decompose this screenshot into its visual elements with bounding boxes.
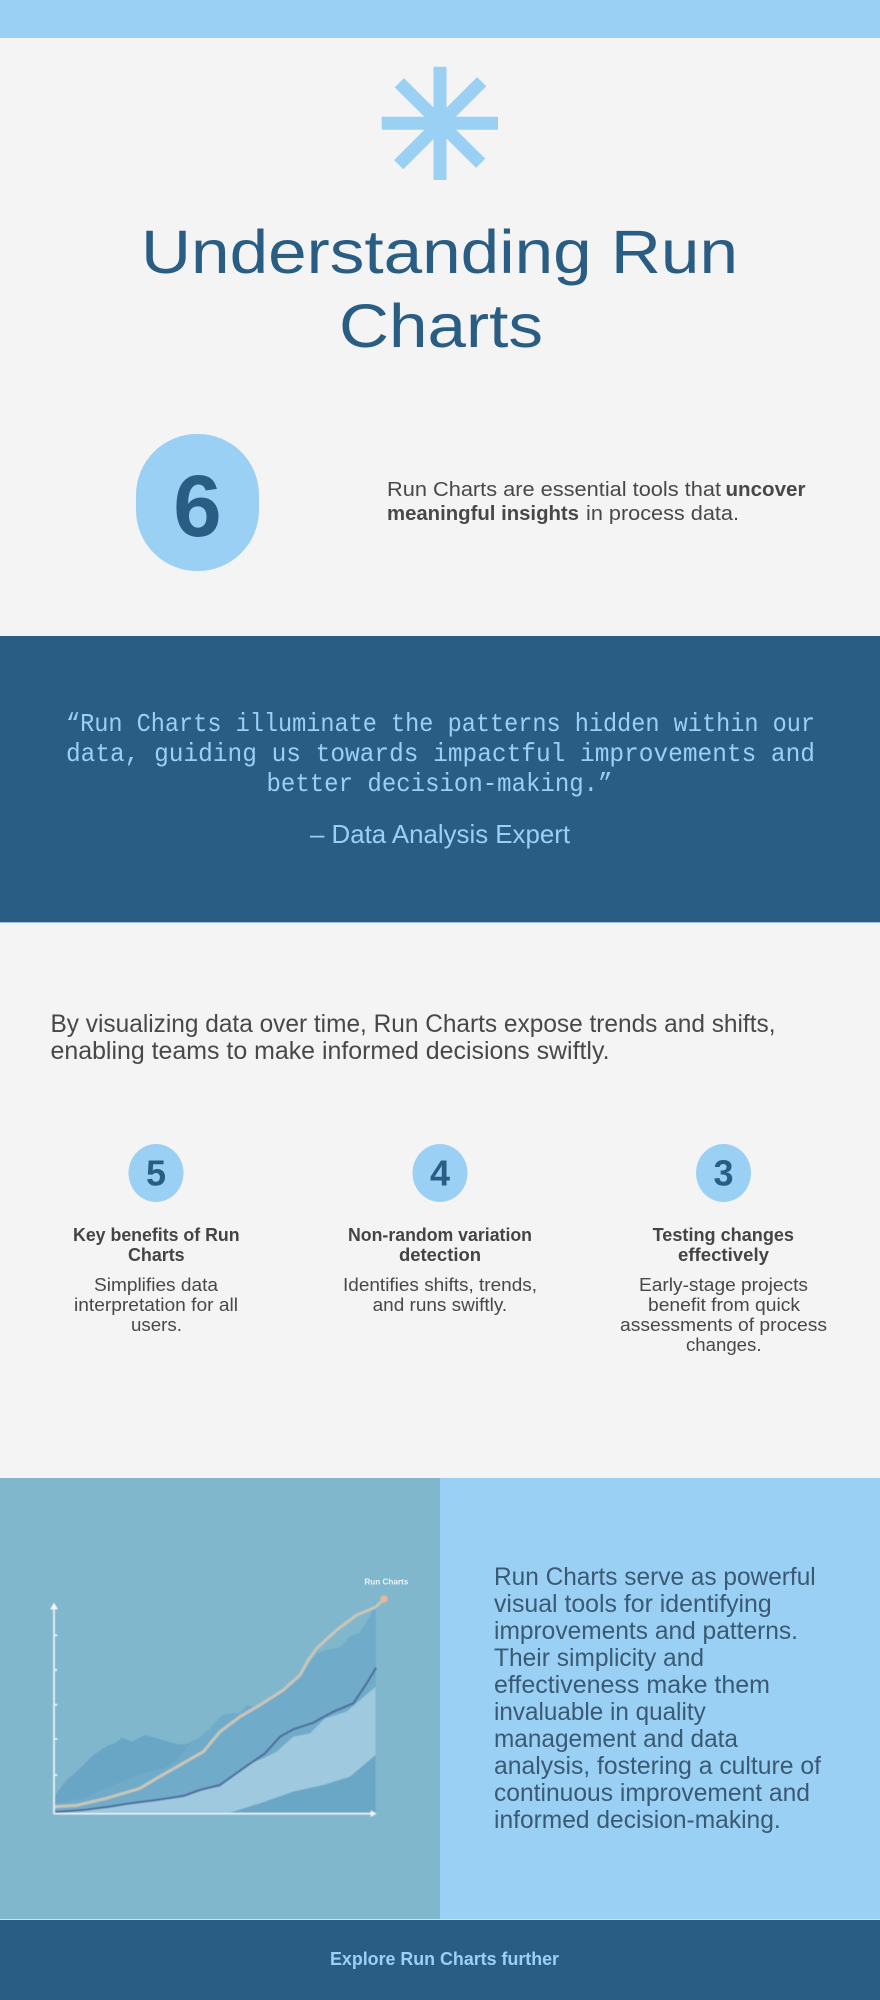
column text: benefit from quick — [648, 1295, 801, 1315]
light area — [54, 1687, 376, 1812]
number badge 3 — [696, 1144, 751, 1202]
number badge 4 — [412, 1144, 468, 1202]
column text: changes. — [686, 1335, 762, 1355]
panel: summary background — [440, 1478, 880, 1919]
column heading: Non-random variation — [348, 1225, 532, 1245]
summary text: continuous improvement and — [494, 1779, 810, 1807]
summary text: invaluable in quality — [494, 1698, 706, 1726]
intro text: uncover — [726, 479, 806, 501]
intro text: Run Charts are essential tools that — [387, 479, 721, 501]
middle area — [54, 1602, 376, 1812]
paragraph: visualizing data: enabling teams to make informed decisions swiftly. — [50, 1037, 610, 1065]
column text: Simplifies data — [94, 1275, 219, 1295]
column text: Identifies shifts, trends, — [343, 1275, 537, 1295]
intro text: meaningful insights — [387, 503, 579, 525]
icon: asterisk — [382, 67, 498, 180]
column: key benefits — [73, 1144, 240, 1335]
footer link text: Explore Run Charts further — [330, 1948, 559, 1969]
column text — [620, 1275, 827, 1355]
column heading: Key benefits of Run — [73, 1225, 240, 1245]
axes — [50, 1603, 377, 1817]
chart label: Run Charts — [364, 1576, 409, 1586]
number badge 5 — [128, 1144, 184, 1202]
summary text: informed decision-making. — [494, 1806, 781, 1834]
column: non-random variation — [343, 1144, 537, 1315]
summary text — [494, 1563, 821, 1834]
quote text: “Run Charts illuminate the patterns hidden within our — [66, 709, 815, 739]
quote attribution: – Data Analysis Expert — [310, 819, 571, 849]
summary text: Their simplicity and — [494, 1644, 704, 1672]
title — [141, 218, 738, 360]
column text: users. — [131, 1315, 182, 1335]
stat badge: 6 — [136, 434, 259, 571]
summary text: visual tools for identifying — [494, 1590, 772, 1618]
purple line — [55, 1668, 376, 1812]
column text: and runs swiftly. — [373, 1295, 507, 1315]
number badge 5: 5 — [146, 1152, 166, 1194]
column text — [74, 1275, 238, 1335]
paragraph: visualizing data: By visualizing data over time, Run Charts expose trends and shifts, — [50, 1010, 776, 1038]
column heading: Testing changes — [653, 1225, 794, 1245]
summary text: improvements and patterns. — [494, 1617, 798, 1645]
column heading — [653, 1225, 794, 1265]
summary text: Run Charts serve as powerful — [494, 1563, 816, 1591]
top band — [0, 0, 880, 38]
intro text — [387, 479, 806, 525]
column text: interpretation for all — [74, 1295, 238, 1315]
column heading: Charts — [128, 1245, 185, 1265]
quote text: data, guiding us towards impactful improvements and — [66, 739, 815, 769]
column heading: detection — [399, 1245, 481, 1265]
column heading — [73, 1225, 240, 1265]
title: Charts — [339, 292, 543, 360]
back area — [54, 1602, 376, 1812]
number badge 4: 4 — [430, 1152, 450, 1194]
column text: assessments of process — [620, 1315, 827, 1335]
intro text: in process data. — [586, 503, 739, 525]
column heading — [348, 1225, 532, 1265]
beige line — [55, 1600, 383, 1807]
bottom area — [230, 1755, 376, 1813]
panel: chart background — [0, 1478, 440, 1919]
column text: Early-stage projects — [639, 1275, 808, 1295]
number badge 3: 3 — [713, 1152, 734, 1194]
summary text: management and data — [494, 1725, 738, 1753]
title: Understanding Run — [141, 218, 738, 286]
footer — [0, 1919, 880, 2000]
paragraph: visualizing data — [50, 1010, 776, 1065]
summary text: analysis, fostering a culture of — [494, 1752, 821, 1780]
stat badge: 6: 6 — [173, 458, 222, 555]
column heading: effectively — [678, 1245, 769, 1265]
column text — [343, 1275, 537, 1315]
quote text — [66, 709, 815, 799]
trend arrow head — [380, 1595, 388, 1603]
quote text: better decision-making.” — [266, 769, 612, 799]
run chart — [50, 1576, 409, 1817]
summary text: effectiveness make them — [494, 1671, 770, 1699]
column: testing changes — [620, 1144, 827, 1355]
panel: quote — [0, 636, 880, 923]
